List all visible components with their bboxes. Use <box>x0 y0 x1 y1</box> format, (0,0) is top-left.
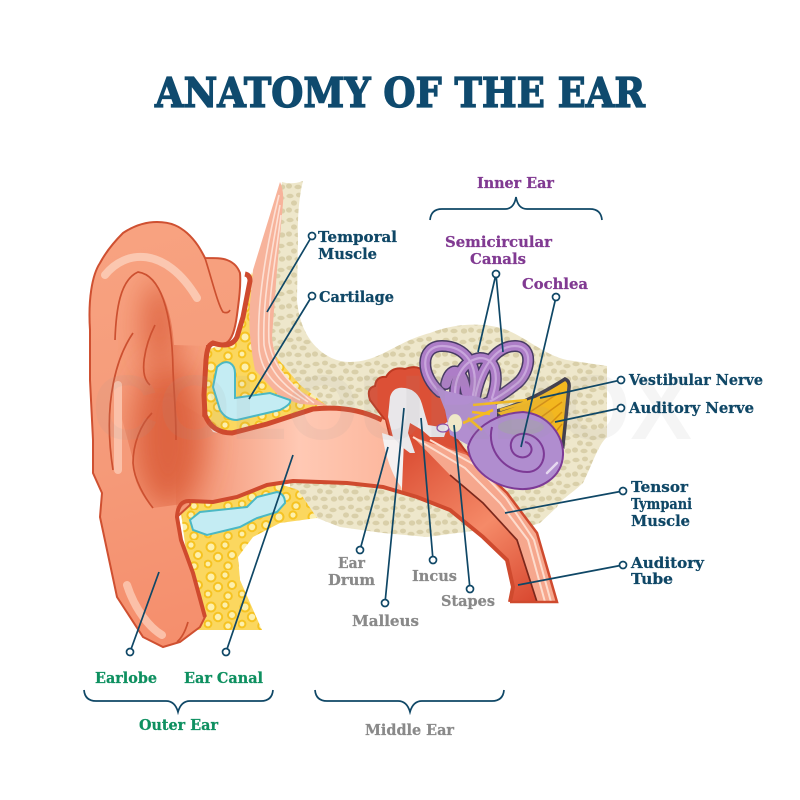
cochlea <box>468 412 563 489</box>
tensor muscle stripes <box>413 437 557 602</box>
label: middle ear: Middle Ear <box>365 721 455 739</box>
label: auditory tube <box>630 554 705 588</box>
label: cochlea: Cochlea <box>522 275 588 293</box>
label: ear drum: Ear <box>338 554 366 572</box>
semicircular canals <box>425 346 528 405</box>
cochlea spiral <box>491 427 544 472</box>
upper fat tissue <box>202 272 330 432</box>
label: malleus: Malleus <box>352 612 419 630</box>
nerve fan <box>493 379 569 445</box>
label: incus: Incus <box>412 567 457 585</box>
label: ear drum <box>328 554 375 589</box>
brace: outer ear <box>84 690 273 712</box>
auditory tube <box>402 432 557 602</box>
upper cartilage <box>213 362 290 420</box>
brace: inner ear <box>430 197 602 220</box>
nerve branches <box>463 398 540 430</box>
temporal bone <box>262 181 607 537</box>
ear canal <box>176 400 402 512</box>
label: tensor tympani muscle: Tensor <box>631 478 689 496</box>
label: temporal muscle: Muscle <box>318 245 377 263</box>
temporal muscle <box>249 182 328 406</box>
lower cartilage <box>190 492 285 535</box>
label: auditory nerve: Auditory Nerve <box>628 399 754 417</box>
label: tensor tympani muscle <box>631 478 692 530</box>
label: temporal muscle <box>318 228 397 263</box>
label: ear canal: Ear Canal <box>184 669 263 687</box>
label: ear drum: Drum <box>328 571 375 589</box>
vestibule <box>436 387 497 445</box>
label: auditory tube: Tube <box>631 570 673 588</box>
cochlea highlight <box>498 419 544 435</box>
brace: middle ear <box>315 690 504 712</box>
label: stapes: Stapes <box>441 592 495 610</box>
ear drum <box>382 433 404 488</box>
label: semicircular canals: Canals <box>470 250 526 268</box>
lower canal wall <box>177 481 513 617</box>
label: semicircular canals <box>445 233 553 268</box>
label: earlobe: Earlobe <box>95 669 157 687</box>
ear illustration <box>89 181 607 647</box>
tube outer wall <box>467 453 557 602</box>
leader lines <box>126 232 626 656</box>
upper canal wall <box>204 274 382 433</box>
label: cartilage: Cartilage <box>319 288 394 306</box>
cochlea gloss <box>547 463 557 473</box>
watermark: COLOURBOX <box>92 357 692 459</box>
label: inner ear: Inner Ear <box>477 174 555 192</box>
middle ear chamber <box>369 367 467 470</box>
concha shading <box>132 280 204 510</box>
ear fold lines <box>109 258 230 642</box>
label: vestibular nerve: Vestibular Nerve <box>628 371 763 389</box>
malleus <box>388 388 450 453</box>
label: temporal muscle: Temporal <box>318 228 397 246</box>
title: ANATOMY OF THE EAR <box>154 70 646 118</box>
label: semicircular canals: Semicircular <box>445 233 553 251</box>
label: auditory tube: Auditory <box>630 554 705 572</box>
stapes <box>437 414 462 432</box>
label: tensor tympani muscle: Muscle <box>631 512 690 530</box>
ear highlights <box>105 257 197 298</box>
lower fat tissue <box>180 484 317 630</box>
label: outer ear: Outer Ear <box>139 716 219 734</box>
label: tensor tympani muscle: Tympani <box>631 495 692 513</box>
outer ear <box>89 222 240 647</box>
